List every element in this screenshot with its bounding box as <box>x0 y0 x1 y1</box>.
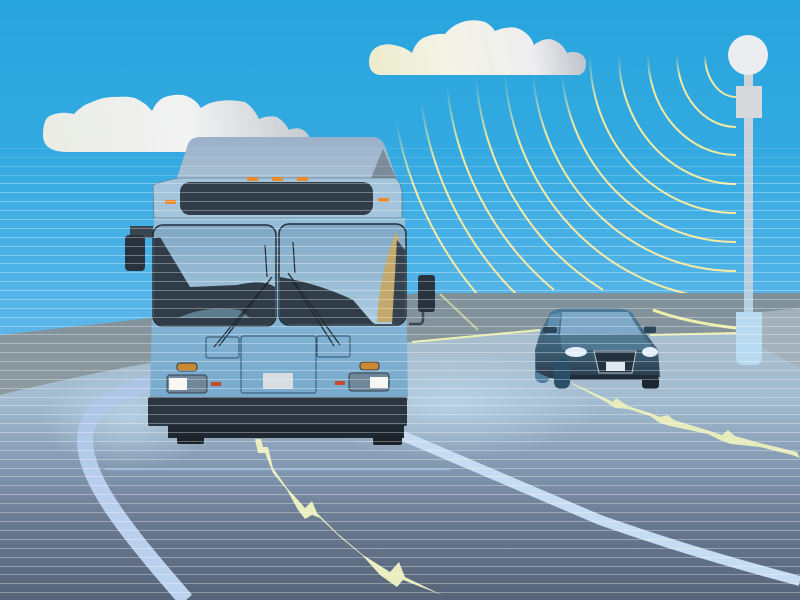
light glow right of the bus <box>300 350 600 460</box>
side window <box>545 312 561 335</box>
pole <box>744 73 753 313</box>
body cap <box>153 178 402 218</box>
cloud: top <box>369 20 586 75</box>
light glow around the bus <box>40 370 220 470</box>
bus <box>125 137 435 445</box>
windshield right <box>279 224 406 325</box>
far road signal lines <box>412 294 736 342</box>
lower skirt <box>168 425 404 438</box>
roof <box>177 137 397 180</box>
base <box>736 312 762 365</box>
far road lane line <box>105 468 450 470</box>
cloud: left <box>43 95 309 152</box>
windshield <box>560 312 642 335</box>
headlights <box>565 347 587 357</box>
roadside unit <box>728 35 768 365</box>
left mirror <box>125 226 153 271</box>
lightning bolt: car to road <box>572 383 800 458</box>
destination sign <box>180 182 373 215</box>
grille <box>594 351 636 373</box>
sensor box <box>736 86 762 118</box>
wipers <box>214 242 340 347</box>
lightning bolt: bus to road <box>255 439 442 595</box>
turn signals <box>177 363 197 371</box>
signal arcs from the roadside unit <box>396 55 736 334</box>
right headlight <box>349 373 389 391</box>
front panels <box>206 336 350 393</box>
horizontal scan lines overlay <box>0 148 800 592</box>
roof side shadow <box>371 149 397 180</box>
wedge right of the pole <box>762 308 800 372</box>
plate <box>606 362 625 371</box>
front left wheel <box>554 358 570 389</box>
right mirror <box>409 275 435 324</box>
car <box>535 308 660 389</box>
red reflectors <box>211 382 221 386</box>
mirrors <box>543 327 557 333</box>
distant ground band <box>0 293 800 420</box>
right lane marking <box>403 436 800 581</box>
roof marker lights <box>165 177 389 204</box>
hood <box>560 334 655 350</box>
far right wheel <box>642 376 659 389</box>
rear left wheel <box>535 353 550 383</box>
bumper <box>148 397 407 426</box>
road surface <box>0 330 800 600</box>
body <box>535 308 660 380</box>
left lane marking <box>85 383 186 600</box>
tires <box>177 436 204 444</box>
sky background <box>0 0 800 340</box>
bumper <box>570 375 658 379</box>
license plate <box>263 373 293 389</box>
globe <box>728 35 768 75</box>
windshield left <box>153 225 276 326</box>
body lower <box>150 218 408 400</box>
left headlight <box>167 375 207 393</box>
